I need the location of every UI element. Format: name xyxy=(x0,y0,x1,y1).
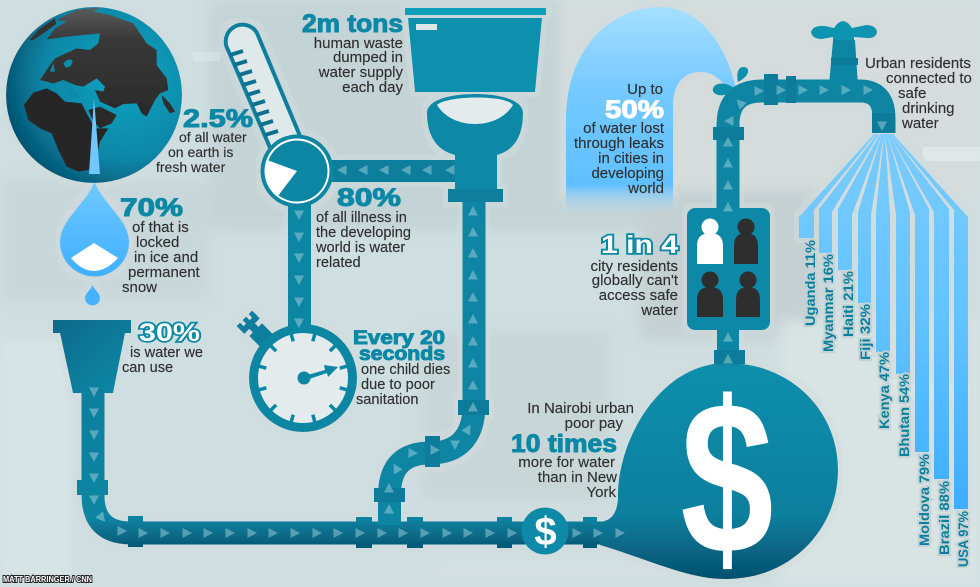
text: Nairobi 10 times: 10 times xyxy=(511,430,617,458)
flange: after coin xyxy=(583,517,597,548)
toilet handle xyxy=(416,24,437,30)
stream: Moldova xyxy=(887,134,929,452)
riser pipe from toilet xyxy=(374,195,489,525)
text: 50 percent leaks: of water lost xyxy=(583,120,665,137)
country labels: Haiti 21% xyxy=(840,270,856,337)
stream: USA xyxy=(891,134,968,509)
text: 80 percent: related xyxy=(316,255,361,271)
text: urban residents xyxy=(865,55,972,132)
text: 70 percent: locked xyxy=(136,234,179,251)
text: Nairobi 10 times: than in New xyxy=(538,469,617,486)
text: 50 percent leaks: 50% xyxy=(605,96,664,124)
person white xyxy=(697,218,723,264)
coin xyxy=(522,508,568,554)
flange: corner xyxy=(128,516,143,547)
text: every 20 seconds xyxy=(353,328,450,408)
leaking water arch xyxy=(566,7,736,214)
text: 50 percent leaks xyxy=(574,81,665,197)
country labels xyxy=(802,239,971,567)
toilet lid xyxy=(405,8,546,15)
text: Nairobi 10 times: In Nairobi urban xyxy=(527,400,634,417)
text: 80 percent xyxy=(315,184,411,271)
coin: $ xyxy=(534,510,557,554)
text: every 20 seconds: sanitation xyxy=(356,392,418,408)
pipe from gauge to clock xyxy=(288,200,311,335)
text: 50 percent leaks: through leaks xyxy=(574,135,664,152)
text: 80 percent: of all illness in xyxy=(316,210,407,226)
country labels: Fiji 32% xyxy=(857,303,873,360)
water streams bar chart xyxy=(799,134,968,509)
toilet xyxy=(405,8,546,202)
text: 2.5 percent: 2.5% xyxy=(183,105,253,133)
text: 30 percent: 30% xyxy=(139,319,200,347)
globe xyxy=(6,7,182,183)
text: 2m tons: water supply xyxy=(318,64,403,81)
thermometer ticks xyxy=(230,51,278,135)
text: every 20 seconds: Every 20 xyxy=(353,328,445,349)
upper pipe to faucet xyxy=(713,74,884,366)
toilet seat xyxy=(437,97,513,124)
text: 70 percent: permanent xyxy=(128,264,201,281)
stream: Kenya xyxy=(876,134,890,352)
flange: riser right xyxy=(407,517,423,548)
clock ticks xyxy=(259,334,347,422)
icon: small water drop xyxy=(85,285,100,306)
text: 2.5 percent: on earth is xyxy=(168,144,233,160)
stream: Myanmar xyxy=(819,134,879,253)
text: 30 percent: is water we xyxy=(130,345,203,361)
icon: water droplets from leak xyxy=(713,67,748,95)
country labels: Bhutan 54% xyxy=(896,373,912,457)
thermometer xyxy=(226,25,300,150)
text: 80 percent: 80% xyxy=(337,184,401,212)
text: Nairobi 10 times: York xyxy=(587,484,616,501)
text: 2m tons: 2m tons xyxy=(302,10,403,38)
toilet tank xyxy=(408,18,542,92)
text: 2m tons: dumped in xyxy=(333,49,403,66)
text: 50 percent leaks: developing xyxy=(591,165,664,182)
text: 70 percent xyxy=(120,194,201,296)
text: 50 percent leaks: Up to xyxy=(627,81,663,98)
country labels: Brazil 88% xyxy=(936,480,952,555)
stream: Uganda xyxy=(799,134,876,238)
funnel xyxy=(53,320,131,393)
text: 30 percent: can use xyxy=(122,360,173,376)
text: 1 in 4: water xyxy=(640,302,678,319)
flange: vertical left xyxy=(77,480,108,495)
text: 80 percent: world is water xyxy=(315,240,405,256)
gauge pie 80 percent xyxy=(260,134,334,208)
person dark 1 xyxy=(734,218,758,264)
pipe from toilet to gauge xyxy=(328,160,458,182)
water funnel from globe xyxy=(89,98,100,174)
text: 70 percent: in ice and xyxy=(134,249,198,266)
text: 1 in 4: globally can't xyxy=(592,272,679,289)
text: 2.5 percent: fresh water xyxy=(156,159,226,175)
text: 2.5 percent: of all water xyxy=(179,129,247,145)
main horizontal pipe xyxy=(77,390,610,548)
text: 70 percent: of that is xyxy=(132,219,189,236)
money bag xyxy=(597,357,838,587)
text: urban residents: drinking xyxy=(902,100,955,117)
stopwatch crown xyxy=(237,311,275,349)
stream: Haiti xyxy=(838,134,882,270)
pipe below people box xyxy=(717,328,739,366)
flange: before coin xyxy=(497,517,512,548)
text: 1 in 4 xyxy=(590,231,679,319)
country labels: Uganda 11% xyxy=(802,239,818,326)
text: urban residents: connected to xyxy=(886,70,972,87)
flow arrows xyxy=(89,85,887,538)
stream: Bhutan xyxy=(885,134,910,374)
toilet flange xyxy=(448,189,503,202)
text: every 20 seconds: due to poor xyxy=(361,377,435,393)
text: 70 percent: 70% xyxy=(120,194,183,222)
person dark 3 xyxy=(736,272,760,317)
text: Nairobi 10 times xyxy=(511,400,634,501)
text: 2m tons xyxy=(302,10,403,96)
text: 50 percent leaks: world xyxy=(627,180,664,197)
text: 30 percent xyxy=(122,319,203,376)
text: Nairobi 10 times: more for water xyxy=(518,454,615,471)
icon: big water drop with ice xyxy=(60,182,129,276)
credit: MATT BARRINGER / CNN xyxy=(3,575,92,584)
text: 1 in 4: city residents xyxy=(590,258,678,275)
text: urban residents: Urban residents xyxy=(865,55,971,72)
country labels: Kenya 47% xyxy=(876,351,892,429)
stream: Brazil xyxy=(889,134,949,479)
people box xyxy=(687,208,770,330)
stream: Fiji xyxy=(858,134,884,303)
text: every 20 seconds: one child dies xyxy=(361,362,450,378)
stopwatch xyxy=(237,311,352,428)
text: 2m tons: each day xyxy=(342,79,403,96)
text: 2.5 percent xyxy=(156,105,253,175)
text: every 20 seconds: seconds xyxy=(359,344,445,365)
text: urban residents: safe xyxy=(898,85,926,102)
text: 80 percent: the developing xyxy=(316,225,411,241)
text: 2m tons: human waste xyxy=(314,35,403,52)
faucet tap xyxy=(811,21,895,133)
text: Nairobi 10 times: poor pay xyxy=(565,415,623,432)
toilet bowl xyxy=(427,94,523,190)
country labels: Myanmar 16% xyxy=(820,253,836,352)
country labels: USA 97% xyxy=(955,510,971,567)
text: 1 in 4: access safe xyxy=(599,287,678,304)
text: 70 percent: snow xyxy=(122,279,157,296)
clock hand xyxy=(298,365,338,384)
text: 50 percent leaks: in cities in xyxy=(598,150,664,167)
person dark 2 xyxy=(697,272,723,317)
flange: riser left xyxy=(356,517,372,548)
text: urban residents: water xyxy=(901,115,939,132)
country labels: Moldova 79% xyxy=(916,453,932,546)
text: 1 in 4: 1 in 4 xyxy=(601,231,678,259)
